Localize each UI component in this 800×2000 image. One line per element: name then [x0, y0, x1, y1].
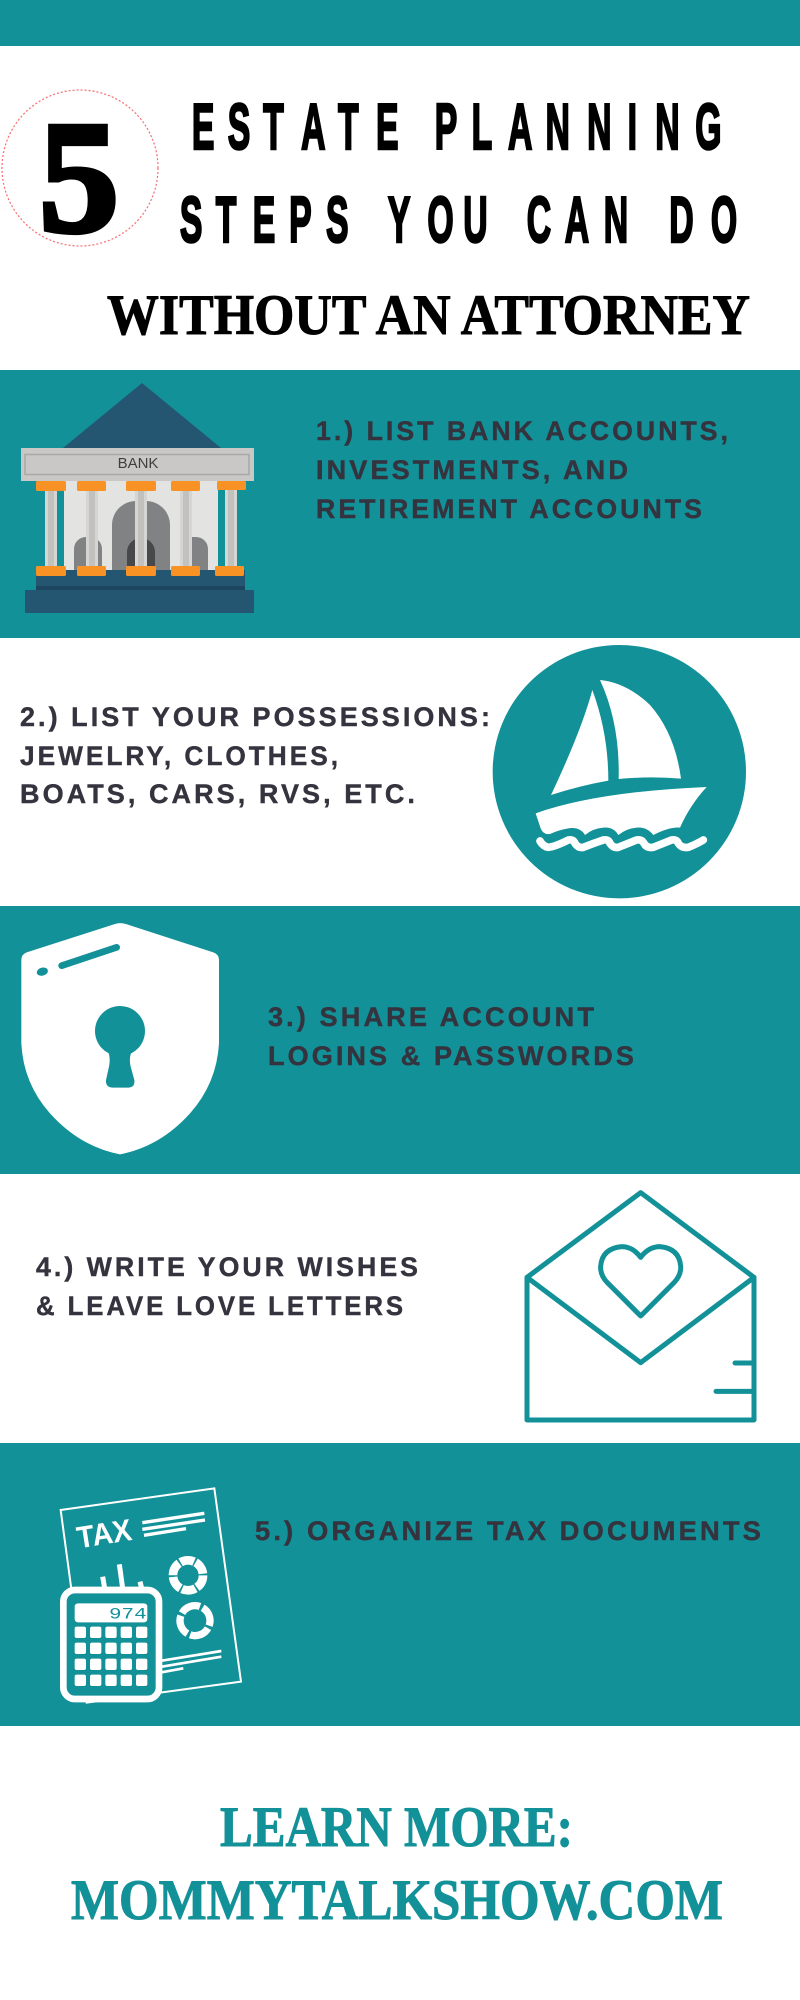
text: step 5: 5.) ORGANIZE TAX DOCUMENTS: [255, 1516, 764, 1546]
big number 5: 5: [39, 88, 119, 266]
icon: bank: BANK: [118, 455, 158, 472]
text: step 2: [20, 702, 493, 809]
text: step 3: LOGINS & PASSWORDS: [268, 1041, 637, 1071]
panel: step 3 band: [0, 906, 800, 1174]
icon: tax document and calculator: TAX: [74, 1513, 135, 1555]
footer: call to action: LEARN MORE:: [220, 1796, 573, 1859]
icon: shield with keyhole: [21, 923, 219, 1154]
panel: step 1 band: [0, 370, 800, 638]
text: step 2: JEWELRY, CLOTHES,: [20, 741, 341, 771]
text: step 4: 4.) WRITE YOUR WISHES: [36, 1252, 421, 1282]
text: step 3: 3.) SHARE ACCOUNT: [268, 1002, 597, 1032]
text: step 4: [36, 1252, 421, 1321]
icon: tax document and calculator: [61, 1488, 241, 1703]
text: step 1: INVESTMENTS, AND: [316, 455, 631, 485]
footer: call to action: [71, 1796, 723, 1932]
icon: envelope with heart: [527, 1193, 754, 1420]
text: step 1: [316, 416, 731, 524]
panel: step 5 band: [0, 1443, 800, 1726]
icon: sailboat in circle: [493, 645, 746, 898]
title line 3: WITHOUT AN ATTORNEY: [107, 284, 750, 347]
text: step 1: 1.) LIST BANK ACCOUNTS,: [316, 416, 731, 446]
footer: call to action: MOMMYTALKSHOW.COM: [71, 1869, 723, 1932]
panel: header: [2, 88, 750, 347]
title line 1: ESTATE PLANNING: [192, 90, 722, 163]
text: step 1: RETIREMENT ACCOUNTS: [316, 494, 705, 524]
text: step 2: BOATS, CARS, RVS, ETC.: [20, 779, 418, 809]
text: step 2: 2.) LIST YOUR POSSESSIONS:: [20, 702, 493, 732]
icon: tax document and calculator: 974: [109, 1606, 147, 1624]
top bar: [0, 0, 800, 46]
icon: bank: [21, 383, 254, 613]
dotted circle behind number: [2, 90, 158, 246]
text: step 4: & LEAVE LOVE LETTERS: [36, 1291, 406, 1321]
title line 2: STEPS YOU CAN DO: [180, 183, 737, 256]
text: step 3: [268, 1002, 637, 1071]
